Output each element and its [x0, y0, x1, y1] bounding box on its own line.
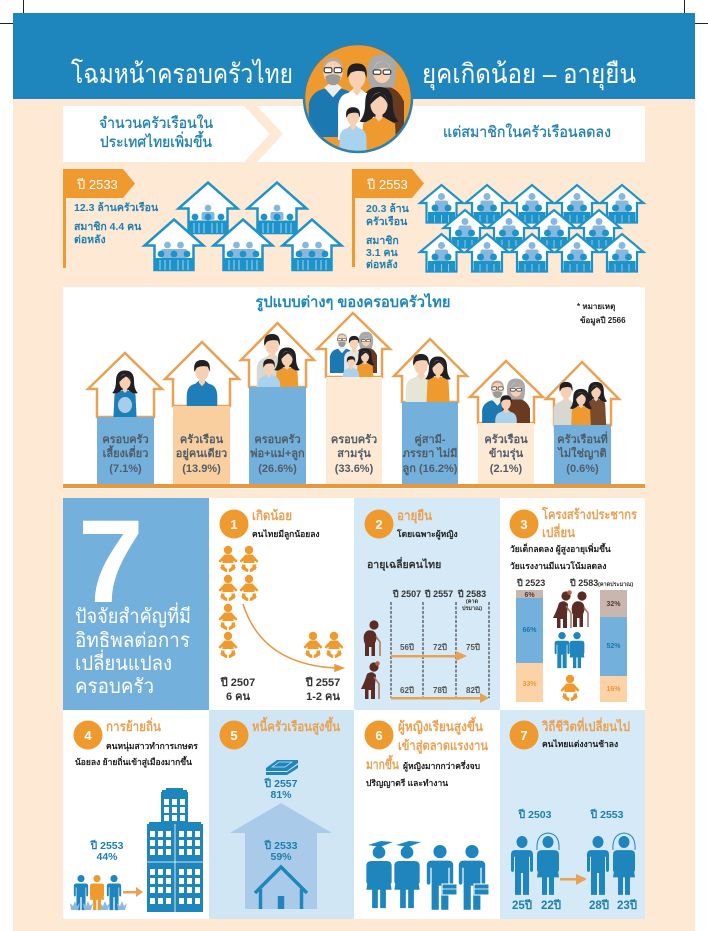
title right: ยุคเกิดน้อย – อายุยืน — [422, 59, 636, 91]
heading 6: ผู้หญิงเรียนสูงขึ้น — [398, 716, 483, 735]
icons: babies — [218, 546, 344, 658]
banner left text — [99, 114, 213, 151]
year labels 7: ปี 2553 — [589, 808, 624, 821]
panel 7: changing lifestyle: คนไทยแต่งงานช้าลง — [542, 739, 618, 749]
stacked bar 2583 — [600, 590, 627, 702]
stats 2553: สมาชิก — [366, 235, 399, 247]
arrow: to city — [123, 887, 143, 897]
bar labels: ลูก (16.2%) — [403, 463, 458, 476]
panel 3: population structure — [500, 498, 645, 710]
panel 3: population structure: วัยแรงงานมีแนวโน้มลดลง — [510, 561, 606, 571]
stat 81%: 81% — [270, 789, 292, 801]
heading 4: การย้ายถิ่น — [106, 717, 161, 734]
panel 6: women's education: 6 — [375, 728, 383, 743]
panel 1: low birth: คนไทยมีลูกน้อยลง — [252, 529, 320, 540]
icons: age groups — [553, 590, 588, 701]
stat 81%: ปี 2557 — [263, 777, 298, 790]
stat 59%: ปี 2533 — [263, 839, 298, 852]
heading 1: เกิดน้อย — [252, 508, 292, 523]
heading 2: อายุยืน — [397, 508, 432, 524]
family portrait circle — [302, 43, 414, 154]
title left: โฉมหน้าครอบครัวไทย — [71, 59, 293, 89]
ages: 82ปี — [466, 685, 480, 695]
heading 3: เปลี่ยน — [542, 523, 575, 540]
bar labels: (2.1%) — [490, 463, 523, 475]
stacked bar 2523: 6% — [524, 592, 535, 599]
banner right text: แต่สมาชิกในครัวเรือนลดลง — [443, 123, 611, 141]
house outlines — [88, 313, 619, 425]
bar labels: สามรุ่น — [337, 448, 371, 461]
ages 7: 25ปี — [512, 899, 532, 912]
stacked bar 2523: 33% — [522, 681, 537, 688]
stats 2553: ต่อหลัง — [366, 259, 398, 271]
bar labels: (13.9%) — [182, 463, 221, 475]
ages 7: 28ปี — [589, 899, 609, 912]
bar labels: (26.6%) — [258, 463, 297, 475]
ages: 75ปี — [466, 642, 480, 652]
year labels 7 — [517, 808, 624, 821]
stacked bar 2583: 16% — [606, 686, 621, 693]
small house — [255, 867, 307, 909]
panel: seven factors heading — [63, 496, 209, 710]
labels 1: ปี 2557 — [305, 676, 340, 689]
panel 4: migration: น้อยลง ย้ายถิ่นเข้าสู่เมืองมากขึ้น — [75, 755, 192, 768]
year labels: ปรมาณ) — [462, 604, 482, 612]
icons: people — [70, 875, 127, 910]
bars — [97, 377, 611, 485]
bar labels: (0.6%) — [566, 463, 599, 475]
heading 3: โครงสร้างประชากร — [541, 506, 637, 522]
panel 1: low birth: 1 — [230, 517, 238, 532]
banner left text: ประเทศไทยเพิ่มขึ้น — [100, 131, 212, 151]
arrow: later marriage — [560, 874, 587, 885]
stat 59% — [263, 839, 298, 863]
panel 7: changing lifestyle: 7 — [520, 728, 528, 743]
panel 4: migration — [63, 710, 209, 919]
arrow: decline — [243, 604, 343, 671]
stats 2533: สมาชิก 4.4 คน — [74, 221, 142, 233]
stat 44%: 44% — [96, 851, 118, 863]
year labels 7: ปี 2503 — [517, 808, 552, 821]
bar labels: ครอบครัว — [102, 433, 149, 446]
heading 5: หนี้ครัวเรือนสูงขึ้น — [252, 716, 340, 735]
stat 81% — [263, 777, 298, 801]
year labels — [516, 578, 633, 588]
crop marks — [0, 0, 708, 24]
panel 6: women's education — [354, 710, 500, 919]
year labels: ปี 2557 — [424, 589, 453, 599]
factors text: อิทธิพลต่อการ — [75, 630, 190, 652]
bar labels: ไม่ใช่ญาติ — [556, 446, 607, 460]
ages — [400, 642, 480, 695]
ages 7: 23ปี — [617, 899, 637, 912]
stats 2553: 3.1 คน — [366, 247, 399, 259]
stacked bar 2523: 66% — [522, 627, 537, 634]
bar labels: ครอบครัว — [254, 433, 301, 446]
panel 2: longevity — [354, 498, 500, 710]
bar labels: (7.1%) — [109, 463, 142, 475]
icons: graduates and workers — [366, 841, 489, 910]
panel 3: population structure: 3 — [520, 517, 528, 532]
labels 1 — [220, 676, 340, 703]
stats 2533: ต่อหลัง — [74, 234, 106, 246]
panel 3: population structure: วัยเด็กลดลง ผู้สูงอายุเพิ่มขึ้น — [510, 542, 611, 555]
factors text — [75, 602, 191, 698]
panel 2: longevity: 2 — [375, 517, 383, 532]
bar labels: ครัวเรือน — [180, 433, 224, 446]
stats 2553: ครัวเรือน — [366, 215, 408, 228]
year labels: (คาดประมาณ) — [598, 580, 633, 588]
bar labels: ภรรยา ไม่มี — [403, 446, 457, 460]
stacked bar 2583: 52% — [606, 643, 621, 650]
banner: members decrease — [257, 106, 645, 162]
ages: 62ปี — [400, 685, 414, 695]
heading 7: วิถีชีวิตที่เปลี่ยนไป — [541, 717, 630, 734]
bar labels: (33.6%) — [335, 463, 374, 475]
bar labels: ครัวเรือนที่ — [557, 431, 608, 446]
header band — [13, 13, 695, 99]
big seven: 7 — [78, 496, 144, 628]
stats 2553: 20.3 ล้าน — [366, 202, 410, 215]
note: * หมายเหตุ — [577, 302, 615, 312]
ages 7 — [512, 899, 637, 912]
heading 6 — [366, 716, 488, 772]
bar labels — [102, 431, 608, 476]
panel 6: women's education: ปริญญาตรี และทำงาน — [366, 778, 448, 789]
family figures — [112, 332, 607, 439]
panel 5: household debt — [209, 710, 354, 919]
panel 4: migration: 4 — [84, 728, 92, 743]
icon: money stack — [266, 760, 298, 775]
stats 2553 — [366, 202, 410, 271]
heading 6: เข้าสู่ตลาดแรงงาน — [398, 738, 488, 754]
year labels: ปี 2507 — [392, 589, 421, 599]
banner left text: จำนวนครัวเรือนใน — [99, 114, 213, 132]
ages: 78ปี — [433, 685, 447, 695]
panel: year 2533 — [63, 169, 342, 270]
tag 2533: ปี 2533 — [76, 177, 118, 192]
panel 4: migration: คนหนุ่มสาวทำการเกษตร — [106, 741, 198, 752]
stacked bar 2583: 32% — [606, 601, 621, 608]
stat 44%: ปี 2553 — [89, 839, 124, 852]
ages 7: 22ปี — [541, 899, 561, 912]
icons: couples — [511, 833, 635, 895]
stats 2533: 12.3 ล้านครัวเรือน — [74, 201, 159, 214]
stat 59%: 59% — [270, 851, 292, 863]
dashed guides — [391, 602, 489, 698]
factors text: เปลี่ยนแปลง — [75, 649, 172, 675]
year labels: ปี 2583 — [457, 589, 486, 599]
stats 2533 — [74, 201, 159, 246]
big house — [230, 803, 332, 909]
year labels — [392, 589, 486, 612]
ages: 56ปี — [400, 642, 414, 652]
tag 2553: ปี 2553 — [366, 177, 408, 192]
icons: fourteen houses — [420, 185, 644, 272]
icon: building — [147, 788, 203, 912]
panel 7: changing lifestyle — [500, 710, 645, 919]
panel: year 2553 — [352, 169, 644, 272]
note: ข้อมูลปี 2566 — [580, 315, 626, 326]
panel 1: low birth — [209, 498, 354, 710]
factors text: ครอบครัว — [75, 676, 154, 698]
bar labels: พ่อ+แม่+ลูก — [250, 448, 305, 461]
panel: family types — [63, 287, 645, 489]
icons: elders — [361, 620, 380, 699]
labels 1: ปี 2507 — [220, 676, 255, 689]
note — [577, 302, 626, 326]
banner: households increase — [63, 106, 270, 162]
heading 3 — [541, 506, 637, 540]
ages: 72ปี — [433, 642, 447, 652]
panel 6: women's education: ผู้หญิงมากกว่าครึ่งจบ — [403, 759, 480, 772]
heading 6: มากขึ้น — [366, 754, 399, 772]
stacked bar 2523 — [516, 590, 543, 702]
bar labels: ข้ามรุ่น — [489, 447, 524, 461]
year labels: ปี 2583 — [569, 578, 598, 588]
panel 5: household debt: 5 — [230, 728, 238, 743]
stat 44% — [89, 839, 124, 863]
life expectancy arrows — [391, 651, 489, 703]
labels 1: 6 คน — [226, 691, 251, 703]
labels 1: 1-2 คน — [306, 691, 340, 703]
heading family types: รูปแบบต่างๆ ของครอบครัวไทย — [256, 292, 450, 312]
bar labels: อยู่คนเดียว — [176, 447, 227, 461]
icons: five houses — [144, 182, 342, 270]
year labels: ปี 2523 — [516, 578, 545, 588]
bar labels: คู่สามี- — [414, 433, 446, 447]
bar labels: ครัวเรือน — [484, 433, 528, 446]
panel 2: longevity: อายุเฉลี่ยคนไทย — [367, 556, 441, 572]
panel 2: longevity: โดยเฉพาะผู้หญิง — [396, 529, 458, 540]
factors text: ปัจจัยสำคัญที่มี — [75, 602, 191, 628]
year labels: (คาด — [466, 598, 479, 605]
bar labels: ครอบครัว — [331, 433, 377, 446]
bar labels: เลี้ยงเดี่ยว — [103, 445, 148, 460]
